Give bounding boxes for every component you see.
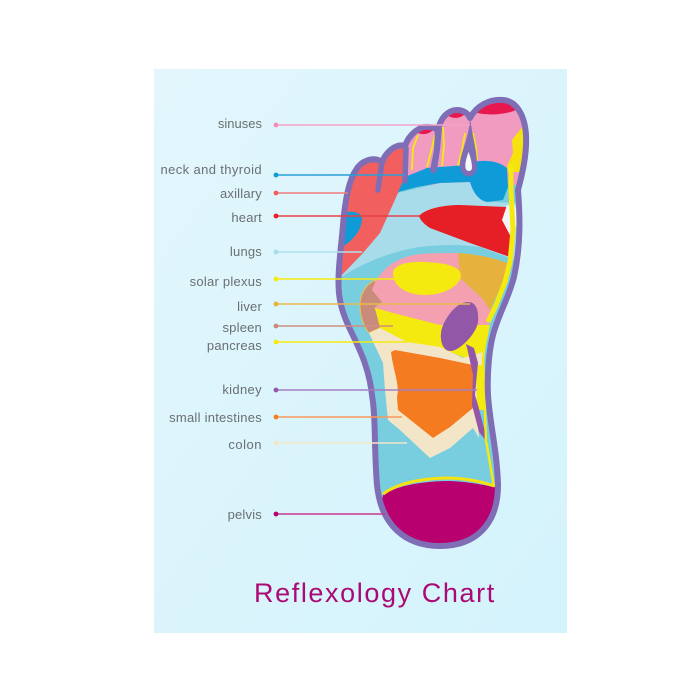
zone: neck and thyroid xyxy=(398,161,508,202)
zone: left blue patch xyxy=(344,212,362,246)
zone: toe tips xyxy=(418,102,516,134)
leader label: kidney: kidney xyxy=(222,382,262,397)
zone: heart xyxy=(419,205,513,257)
toe edges xyxy=(412,127,477,170)
zone: white patch xyxy=(502,205,516,235)
zone: right yellow line xyxy=(483,330,494,487)
leader label: axillary xyxy=(220,186,348,201)
leader label: liver: liver xyxy=(237,299,262,314)
toe separators xyxy=(378,118,477,190)
zone: lungs xyxy=(338,182,520,279)
zone: big toe yellow xyxy=(507,127,524,172)
leader label: pelvis: pelvis xyxy=(228,507,262,522)
leader label: spleen: spleen xyxy=(222,320,262,335)
leader label: liver xyxy=(237,299,470,314)
reflexology infographic xyxy=(154,69,567,633)
leader label: pancreas xyxy=(207,338,408,353)
leader label: neck and thyroid xyxy=(161,162,405,177)
leader label: heart xyxy=(231,210,420,225)
zone: small intestines xyxy=(391,350,473,438)
leader label: colon: colon xyxy=(228,437,262,452)
zone: solar plexus pink xyxy=(372,253,492,328)
leader label: solar plexus xyxy=(190,274,395,289)
zone: liver xyxy=(458,253,507,310)
leader label: colon xyxy=(228,437,407,452)
zone: pelvis xyxy=(382,481,495,543)
zone: solar plexus xyxy=(393,262,461,295)
leader label: lungs: lungs xyxy=(230,244,262,259)
leader label: lungs xyxy=(230,244,362,259)
leader label: small intestines: small intestines xyxy=(169,410,262,425)
leader label: sinuses xyxy=(218,116,470,131)
leader label: sinuses: sinuses xyxy=(218,116,262,131)
foot zones xyxy=(342,102,524,543)
foot chart xyxy=(336,96,530,549)
leader label: small intestines xyxy=(169,410,402,425)
leader label: pancreas: pancreas xyxy=(207,338,262,353)
background panel xyxy=(154,69,567,633)
leader label: neck and thyroid: neck and thyroid xyxy=(161,162,262,177)
zone: axillary xyxy=(342,148,404,276)
zone: pelvis yellow edge xyxy=(383,478,494,494)
zone: toes pink xyxy=(408,110,522,185)
leader label: heart: heart xyxy=(231,210,262,225)
leader label: kidney xyxy=(222,382,477,397)
zone: pancreas xyxy=(375,308,490,410)
zone: spleen xyxy=(360,280,384,333)
leader label: axillary: axillary xyxy=(220,186,262,201)
leader label: spleen xyxy=(222,320,393,335)
foot outline xyxy=(338,100,526,546)
leader label: pelvis xyxy=(228,507,385,522)
leader label: solar plexus: solar plexus xyxy=(190,274,262,289)
zone: right yellow band xyxy=(488,165,513,322)
zone: base sole xyxy=(342,184,516,498)
title: Reflexology Chart xyxy=(254,578,496,608)
zone: kidney xyxy=(441,302,488,443)
zone: colon xyxy=(369,328,483,458)
